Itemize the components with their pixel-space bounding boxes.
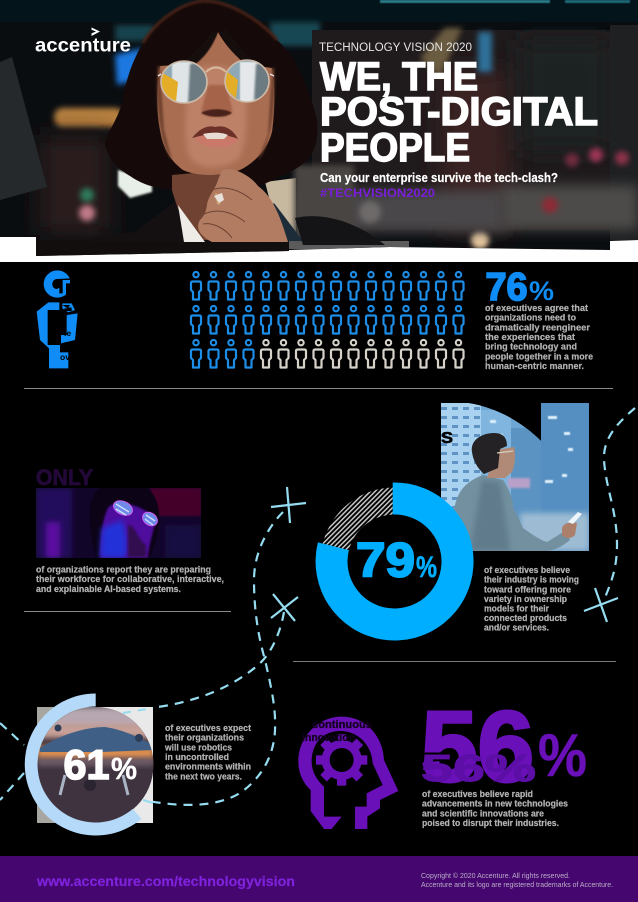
hero heading: POST-DIGITAL [320, 90, 598, 134]
text: 76% description: organizations need to [485, 313, 576, 323]
hero heading [319, 42, 598, 200]
big person icon [37, 270, 78, 368]
photo: man with phone overlooking city [441, 403, 589, 551]
text: 76% description: the experiences that [485, 332, 575, 342]
text: ownership models description: their industry is moving [484, 575, 579, 585]
text: 76% description: people together in a more [485, 351, 593, 361]
footer band: Copyright © 2020 Accenture. All rights reserved. [421, 871, 570, 880]
text: 56% description: poised to disrupt their industries. [422, 818, 559, 828]
white band below hero [0, 230, 638, 262]
big person icon: ov [60, 352, 70, 362]
hand and phone [562, 523, 577, 538]
heading fragment: S: S [441, 430, 453, 447]
text: ownership models description: and/or services. [484, 623, 549, 633]
dashed journey path with crosses [0, 408, 635, 805]
text: AI workforce description: and explainable AI-based systems. [36, 584, 181, 594]
stat: 56%: 56 [421, 691, 534, 803]
logo: accenture [35, 28, 131, 56]
text: robotics description: will use robotics [164, 742, 232, 752]
text: 76% description: dramatically reengineer [485, 322, 591, 332]
icon: head with gear: continuous [312, 719, 372, 731]
beige blazer and neck background [265, 178, 296, 232]
hero heading: WE, THE [320, 55, 478, 99]
left bokeh [54, 108, 124, 127]
stat: 76% [486, 266, 554, 309]
text: ownership models description: models for their [484, 604, 549, 614]
text: robotics description: of executives expect [165, 723, 251, 733]
jacket [118, 202, 184, 240]
text: 76% description: of executives agree that [485, 303, 588, 313]
text: robotics description: in uncontrolled [165, 752, 229, 762]
icon: head with gear [298, 717, 398, 829]
text: AI workforce description [36, 564, 224, 594]
text: 76% description: bring technology and [485, 342, 577, 352]
stat: 76%: % [529, 276, 554, 306]
photo: drone with ring chart 61%: 61 [64, 741, 110, 788]
photo: woman with neon glasses [36, 488, 201, 558]
stat: 56% [421, 691, 587, 803]
text: 76% description: human-centric manner. [485, 361, 584, 371]
text: 56% description: of executives believe rapid [422, 789, 533, 799]
photo: drone with ring chart 61% [25, 694, 154, 835]
pictogram: 76 of 100 people [191, 272, 464, 368]
footer band: Accenture and its logo are registered trademarks of Accenture. [421, 880, 613, 889]
big person icon: ie [64, 328, 71, 338]
hero heading: Can your enterprise survive the tech-clash? [320, 171, 558, 185]
stat: 56%: % [538, 722, 587, 789]
face [157, 32, 274, 175]
dark strip [36, 240, 292, 256]
heading fragment: ONLY: ONLY [36, 465, 93, 490]
glasses [162, 62, 206, 102]
donut chart: 79%: 79 [356, 534, 415, 588]
hand [198, 169, 288, 242]
hair [105, 1, 317, 190]
shirt [452, 475, 570, 551]
nose and lips [202, 85, 232, 117]
footer band [0, 856, 638, 902]
text: 56% description [422, 789, 568, 828]
neck [172, 173, 220, 240]
footer band: www.accenture.com/technologyvision [36, 874, 295, 889]
logo: accenture: accenture [35, 36, 131, 56]
text: robotics description: the next two years. [165, 771, 242, 781]
donut chart: 79% [316, 482, 474, 640]
hero photo: woman with glasses [0, 0, 638, 260]
donut chart: 79%: % [416, 551, 437, 584]
text: ownership models description [484, 565, 579, 633]
hero heading: TECHNOLOGY VISION 2020 [319, 42, 472, 54]
text: 56% description: and scientific innovations are [422, 808, 544, 818]
text: ownership models description: connected products [484, 613, 567, 623]
text: 56% description: advancements in new technologies [422, 799, 568, 809]
text: robotics description: their organizations [165, 733, 244, 743]
stat: 76%: 76 [486, 266, 528, 309]
icon: head with gear: innovation [302, 732, 355, 744]
text: ownership models description: toward offering more [484, 584, 571, 594]
bangs strands [194, 32, 240, 64]
stat: 56%: 56% [421, 748, 536, 790]
text: ownership models description: of executives believe [484, 565, 570, 575]
text: robotics description [164, 723, 251, 781]
hero heading: #TECHVISION2020 [320, 186, 435, 200]
text: ownership models description: variety in ownership [484, 594, 567, 604]
collar [178, 205, 205, 242]
text: 76% description [485, 303, 593, 371]
text: AI workforce description: of organizations report they are preparing [36, 564, 211, 574]
text: robotics description: environments within [165, 762, 251, 772]
text: AI workforce description: their workforce for collaborative, interactive, [36, 574, 224, 584]
head [487, 447, 515, 478]
photo: drone with ring chart 61%: % [111, 751, 137, 786]
big person icon: ch [60, 340, 70, 350]
hero heading: PEOPLE [320, 126, 470, 170]
